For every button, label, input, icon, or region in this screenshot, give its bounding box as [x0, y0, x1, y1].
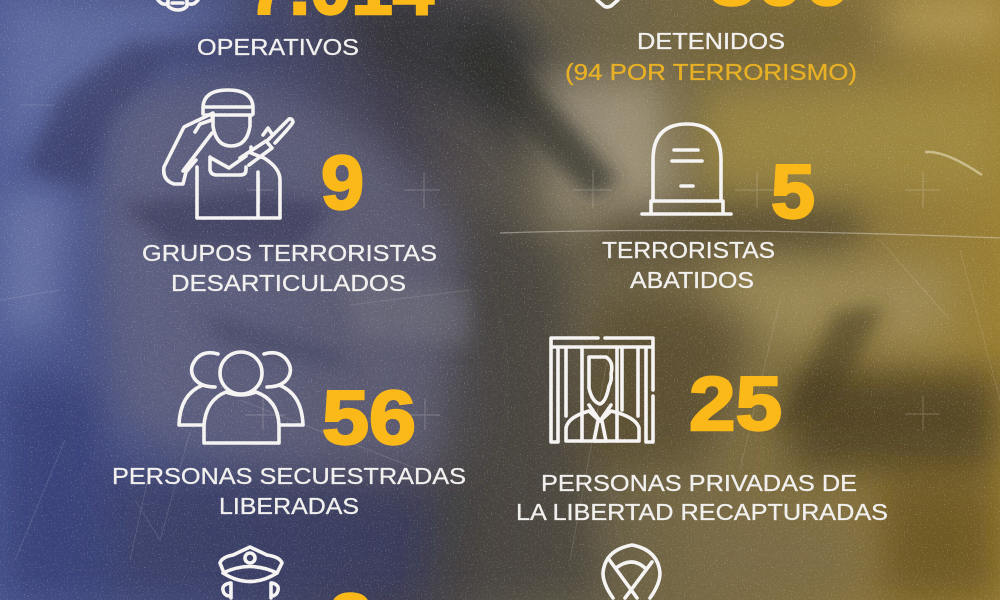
label: abatidos: ABATIDOS — [630, 267, 754, 293]
block: policia — [220, 547, 372, 600]
block: grupos terroristas — [142, 90, 437, 296]
label: detenidos: DETENIDOS — [637, 28, 785, 54]
label: desarticulados: DESARTICULADOS — [171, 270, 406, 296]
label: personas privadas de: PERSONAS PRIVADAS DE — [541, 470, 857, 496]
label: la libertad recapturadas: LA LIBERTAD RECAPTURADAS — [516, 499, 888, 525]
number: 5: 5 — [771, 150, 815, 235]
film scratches and crosshair texture — [0, 105, 1000, 560]
label: personas secuestradas: PERSONAS SECUESTRADAS — [112, 463, 466, 489]
icon: saluting soldier — [164, 90, 293, 218]
icon: group of people — [179, 352, 303, 443]
label: detenidos por terrorismo: (94 POR TERRORISMO) — [565, 59, 857, 85]
label: terroristas: TERRORISTAS — [602, 237, 775, 263]
number: 9: 9 — [321, 141, 364, 226]
label: liberadas: LIBERADAS — [219, 493, 359, 519]
label: operativos: OPERATIVOS — [197, 34, 359, 60]
number: 56: 56 — [322, 376, 416, 461]
block: personas secuestradas — [112, 352, 466, 519]
number: 25: 25 — [689, 362, 782, 447]
block: recapturados — [516, 338, 888, 525]
icon: prisoner behind bars — [551, 338, 653, 442]
icon: awareness ribbon — [603, 545, 660, 598]
block: detenidos — [565, 0, 857, 85]
block: terroristas abatidos — [602, 124, 815, 293]
block: ribbon — [603, 545, 660, 598]
icon: operativos emblem — [158, 0, 198, 10]
icon: police officer — [220, 547, 282, 598]
icon: detenidos badge — [597, 0, 618, 7]
label: grupos terroristas: GRUPOS TERRORISTAS — [142, 240, 437, 266]
icon: tombstone — [642, 124, 731, 214]
block: operativos — [158, 0, 434, 60]
